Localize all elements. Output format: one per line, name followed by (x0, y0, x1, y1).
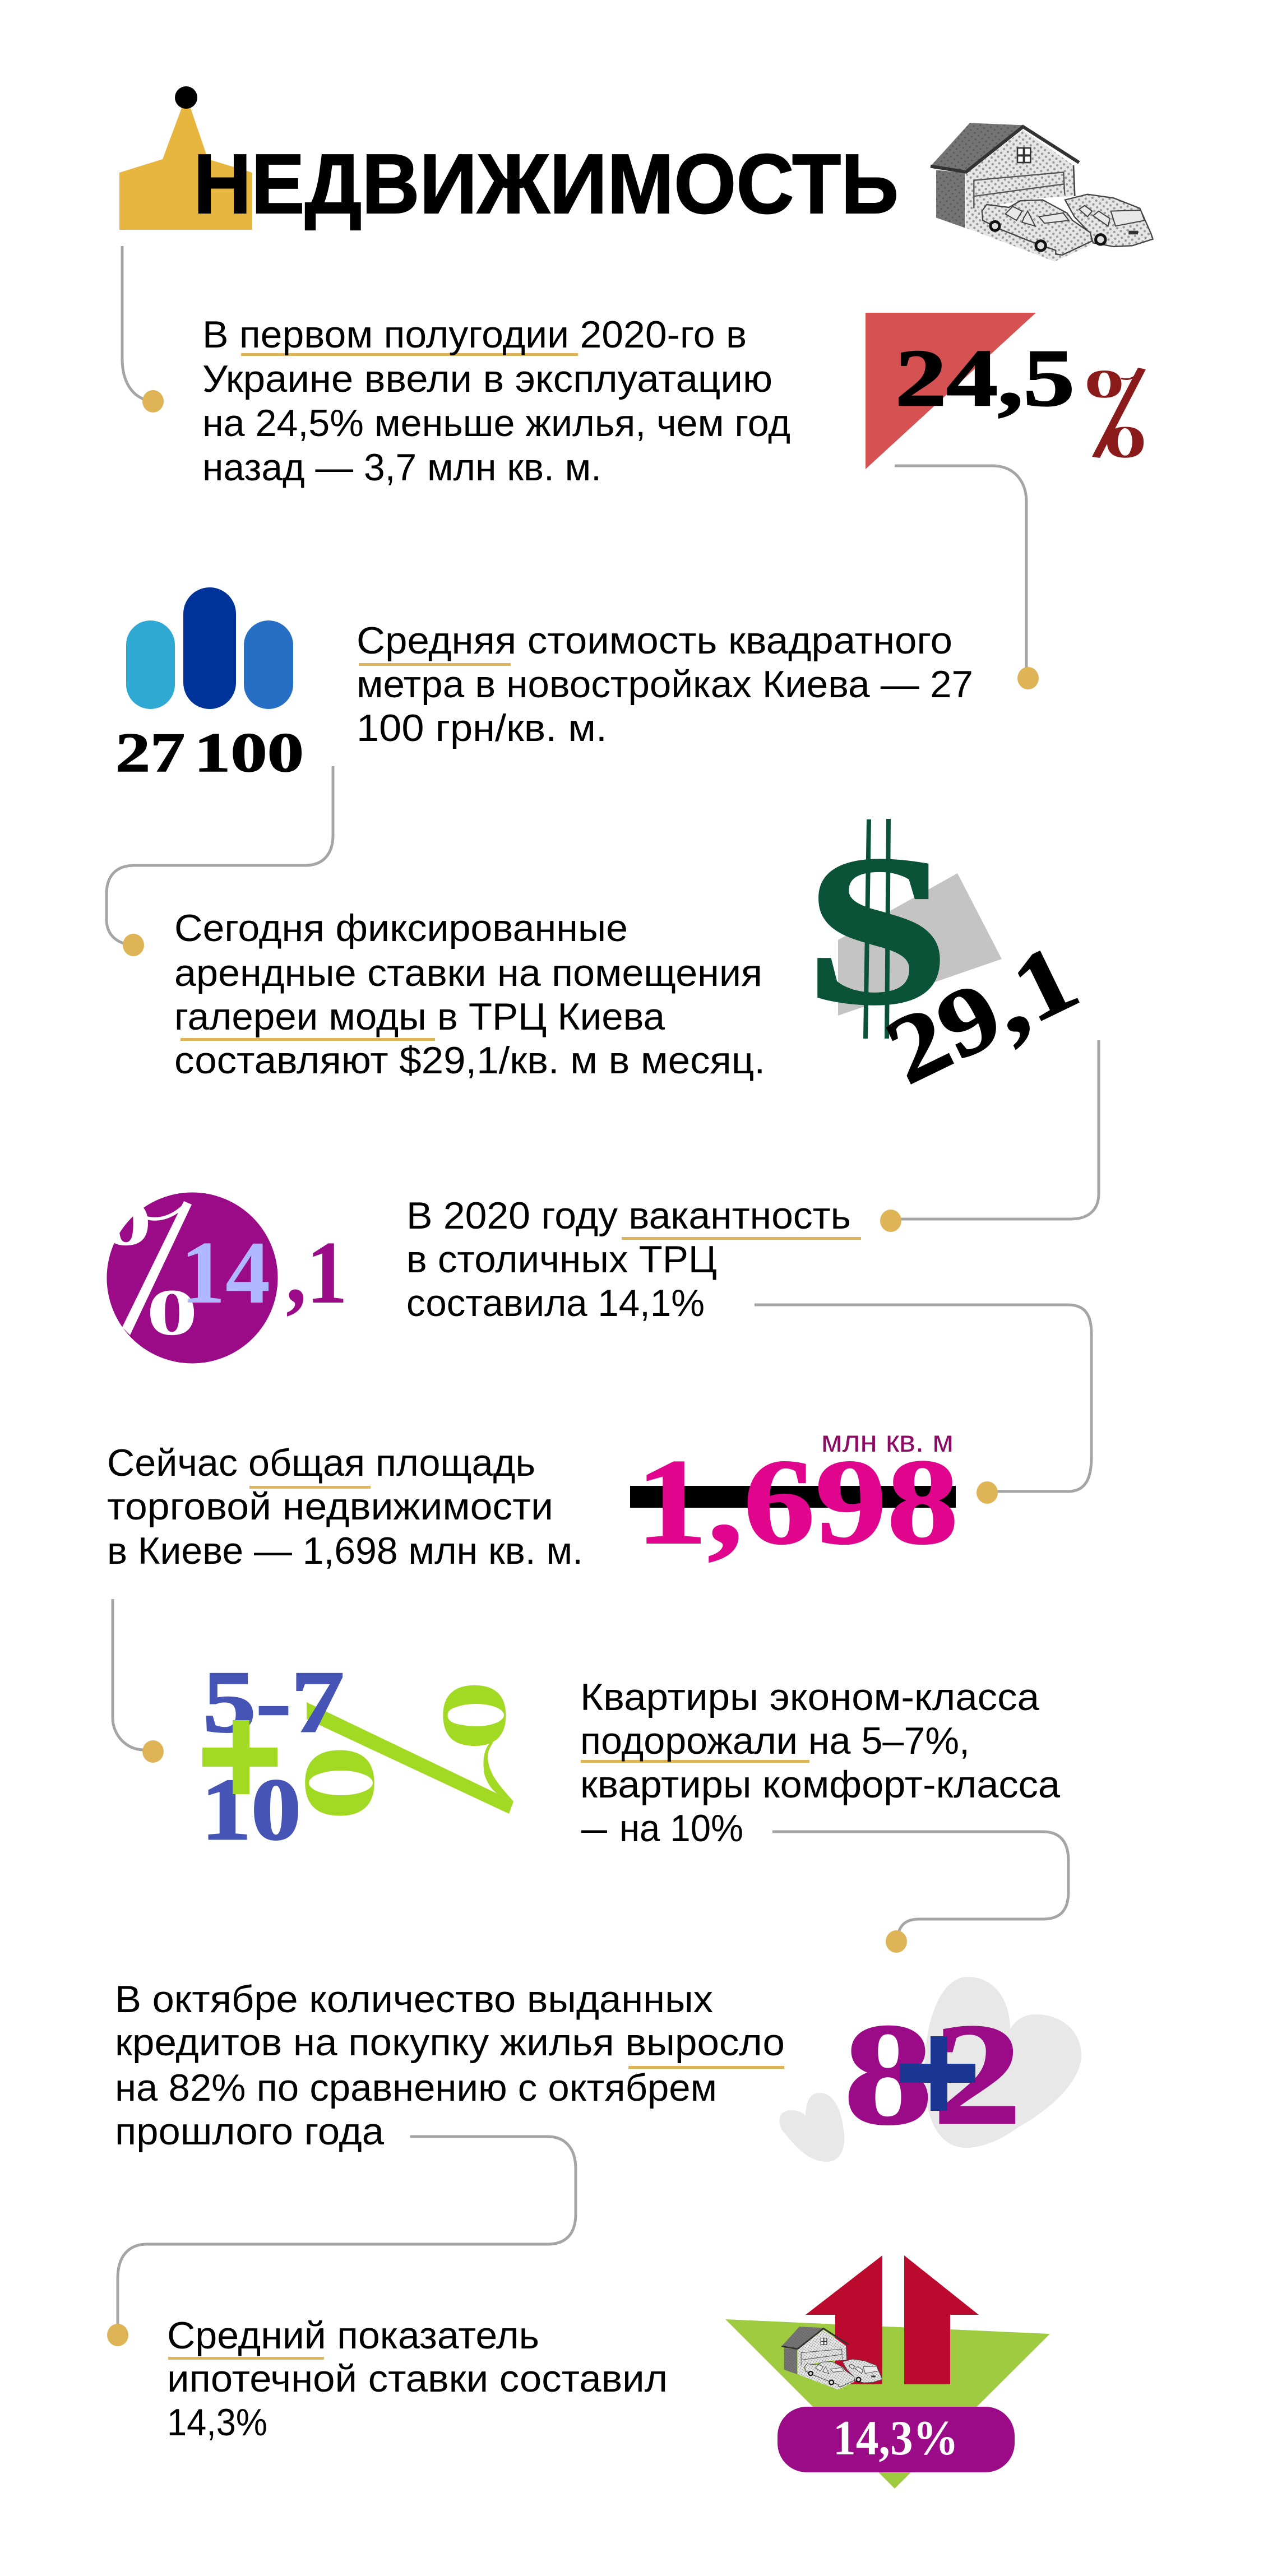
stat: 14,1% circle: 0 (146, 1276, 198, 1349)
text block: price per square metre: Средняя стоимость квадратного (357, 619, 952, 662)
text block: price per square metre: 100 грн/кв. м. (357, 707, 607, 749)
text block: vacancy: в столичных ТРЦ (406, 1238, 717, 1281)
text block: apartment prices: — (581, 1807, 607, 1850)
connector: area to apartment prices (113, 1599, 164, 1763)
stat: 24,5%: 0 (1084, 362, 1124, 406)
stat: 5-7 + 10 percent: 0 (284, 1744, 397, 1822)
text block: rental rates (174, 907, 765, 1082)
text block: rental rates: Сегодня фиксированные (174, 907, 628, 949)
text block: apartment prices: подорожали на 5–7%, (580, 1720, 970, 1762)
text block: housing commissioned: В первом полугодии 2020-го в (202, 313, 747, 356)
text block: vacancy (406, 1194, 861, 1324)
stat: 5-7 + 10 percent: 5-7 (203, 1653, 344, 1750)
text block: mortgage rate: ипотечной ставки составил (167, 2357, 668, 2400)
stat: 5-7 + 10 percent: 10 (201, 1760, 301, 1858)
text block: rental rates: составляют $29,1/кв. м в месяц. (174, 1039, 765, 1082)
text block: rental rates: галереи моды в ТРЦ Киева (174, 995, 665, 1038)
text block: loans: на 82% по сравнению с октябрем (115, 2067, 717, 2109)
connector: first stat to price (895, 466, 1039, 689)
stat: 27 100: 27 (115, 721, 185, 784)
stat: 14,1% circle: ,1 (286, 1222, 348, 1322)
text block: retail area (107, 1442, 583, 1572)
text block: retail area: торговой недвижимости (107, 1485, 553, 1528)
text block: price per square metre (357, 619, 973, 749)
stat: 82 plus with hearts (779, 1977, 1081, 2162)
stat: 27 100 (115, 721, 304, 784)
text block: housing commissioned: Украине ввели в эксплуатацию (202, 358, 772, 400)
text block: vacancy: В 2020 году вакантность (406, 1194, 851, 1237)
stat: 82 plus with hearts: 82 (844, 1994, 1022, 2155)
text block: loans: В октябре количество выданных (115, 1978, 713, 2021)
stat: mortgage triangle and arrows (725, 2255, 1050, 2489)
connector: price to rental (107, 766, 333, 956)
connector: vacancy to area (755, 1305, 1091, 1504)
stat: mortgage triangle and arrows: 14,3% (833, 2411, 959, 2466)
stat: 24,5% (866, 313, 1147, 469)
connector: apartment prices to loans (772, 1832, 1068, 1953)
text block: price per square metre: метра в новостройках Киева — 27 (357, 663, 973, 706)
stat: 14,1% circle: 14 (181, 1222, 270, 1322)
text block: retail area: в Киеве — 1,698 млн кв. м. (107, 1530, 583, 1572)
stat: dollar sign 29,1 (805, 811, 1093, 1104)
icon: yellow crown shape (119, 86, 252, 230)
text block: apartment prices: Квартиры эконом-класса (580, 1676, 1039, 1718)
icon: small house with cars (781, 2327, 882, 2389)
text block: loans: прошлого года (115, 2110, 384, 2153)
stat: 5-7 + 10 percent (201, 1653, 527, 1858)
text block: mortgage rate (167, 2314, 668, 2444)
chart icon: three blue pills (126, 587, 293, 709)
text block: apartment prices (580, 1676, 1060, 1850)
stat: 24,5%: 24,5 (895, 333, 1075, 423)
stat: 14,1% circle (100, 1186, 348, 1363)
connector: title to first fact (122, 246, 164, 413)
text block: housing commissioned (202, 313, 790, 489)
text block: housing commissioned: на 24,5% меньше жилья, чем год (202, 402, 790, 444)
stat: 14,1% circle: 0 (100, 1186, 152, 1259)
text block: apartment prices: квартиры комфорт-класса (580, 1763, 1060, 1806)
stat: dollar sign 29,1: S (805, 811, 950, 1049)
text block: loans: кредитов на покупку жилья выросло (115, 2021, 785, 2064)
text block: housing commissioned: назад — 3,7 млн кв. м. (202, 446, 601, 489)
text block: loans (115, 1978, 785, 2153)
stat: 1,698 million sq m: 1,698 (636, 1434, 959, 1570)
connector: rental to vacancy (880, 1040, 1099, 1232)
text block: mortgage rate: 14,3% (167, 2401, 267, 2444)
stat: dollar sign 29,1: 29,1 (870, 924, 1093, 1104)
stat: 1,698 million sq m: млн кв. м (821, 1425, 954, 1458)
stat: 5-7 + 10 percent: 0 (424, 1680, 527, 1752)
stat: 24,5%: 0 (1104, 416, 1147, 467)
text block: vacancy: составила 14,1% (406, 1282, 705, 1324)
title: НЕДВИЖИМОСТЬ (193, 136, 899, 231)
text block: retail area: Сейчас общая площадь (107, 1442, 535, 1484)
stat: 27 100: 100 (194, 721, 304, 784)
text block: mortgage rate: Средний показатель (167, 2314, 539, 2357)
text block: rental rates: арендные ставки на помещения (174, 952, 762, 994)
icon: house with cars (931, 123, 1153, 262)
text block: apartment prices: на 10% (619, 1807, 743, 1850)
connector: loans to mortgage (107, 2137, 576, 2346)
